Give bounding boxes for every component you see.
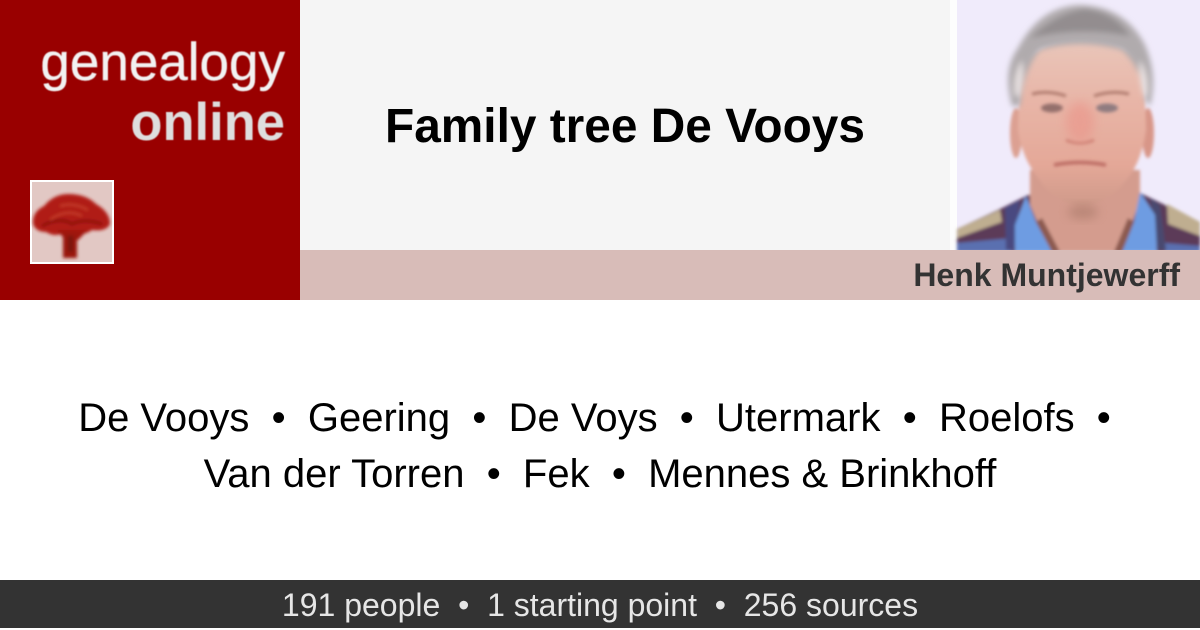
footer stats bar xyxy=(0,580,1200,628)
hair xyxy=(1008,5,1153,106)
sweater xyxy=(957,192,1200,252)
stats text: 191 people • 1 starting point • 256 sources xyxy=(282,587,918,623)
title: Family tree De Vooys xyxy=(385,100,865,153)
neck xyxy=(1030,170,1140,252)
icon: tree xyxy=(30,180,114,264)
shirt collar xyxy=(1015,196,1052,252)
nose xyxy=(1066,102,1094,142)
eyes xyxy=(1041,104,1063,112)
panel: logo xyxy=(0,0,300,300)
family names xyxy=(78,396,1111,496)
name bar xyxy=(300,250,1200,300)
mouth xyxy=(1054,162,1106,165)
nose base xyxy=(1066,140,1094,143)
face xyxy=(1018,40,1146,206)
panel: title background xyxy=(300,0,950,250)
author name: Henk Muntjewerff xyxy=(913,257,1180,293)
names line 2: Van der Torren • Fek • Mennes & Brinkhoff xyxy=(204,452,996,496)
facial features xyxy=(1032,92,1129,165)
logo word: genealogy: genealogy xyxy=(40,33,285,92)
names line 1: De Vooys • Geering • De Voys • Utermark • Roelofs • xyxy=(78,396,1111,440)
chin shadow xyxy=(1068,205,1098,219)
brows xyxy=(1032,92,1066,96)
ears xyxy=(1010,108,1022,158)
portrait photo xyxy=(954,0,1200,250)
logo word: online: online xyxy=(130,93,285,152)
